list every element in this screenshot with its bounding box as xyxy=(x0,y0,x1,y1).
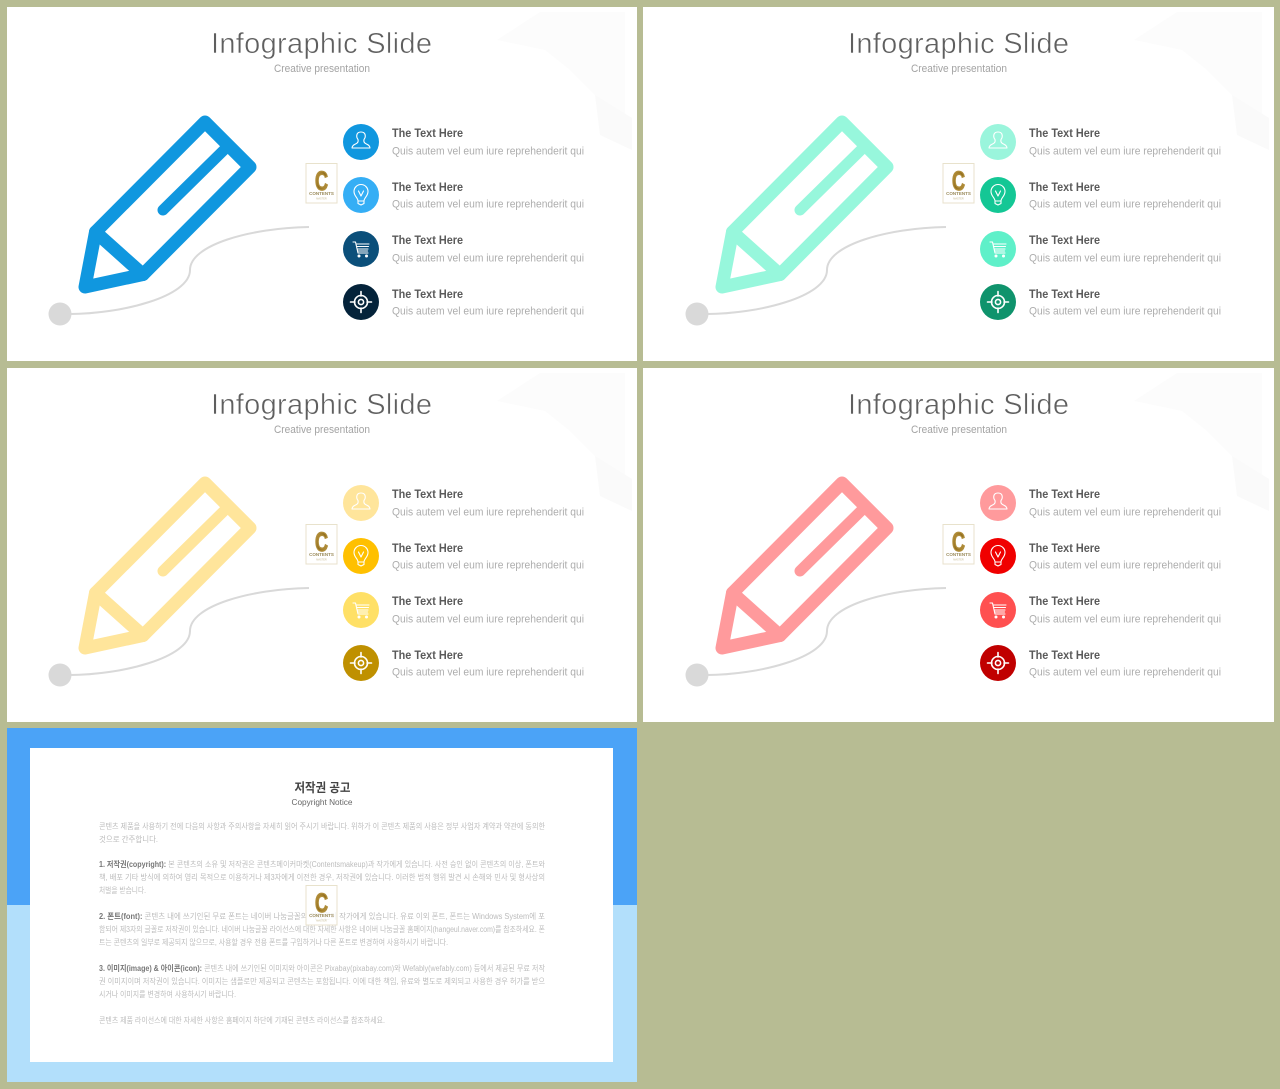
item 2 xyxy=(343,177,584,213)
panel: yellow slide xyxy=(7,368,637,722)
item 3: Quis autem vel eum iure reprehenderit qui xyxy=(392,614,584,626)
item 3 xyxy=(343,231,584,267)
item 2: The Text Here xyxy=(1029,182,1100,194)
logo badge xyxy=(943,164,974,203)
logo badge: C xyxy=(315,166,328,196)
panel: copyright notice xyxy=(7,728,637,1082)
item 3: Quis autem vel eum iure reprehenderit qui xyxy=(1029,614,1221,626)
logo badge: CONTENTS xyxy=(946,552,971,557)
title: Infographic Slide xyxy=(211,389,432,421)
image and icon paragraph: 권 이미지이며 저작권이 있습니다. 이미지는 샘플로만 제공되고 콘텐츠는 포함됩니다. 이에 대한 책임, 유료와 별도로 제외되고 사용한 경우 허가를 받으 xyxy=(99,976,545,986)
image and icon paragraph: 시거나 이미지를 변경하여 사용하시기 바랍니다. xyxy=(99,989,236,999)
item 2: Quis autem vel eum iure reprehenderit qui xyxy=(392,560,584,572)
item 3 xyxy=(980,231,1221,267)
item 2: Quis autem vel eum iure reprehenderit qui xyxy=(392,198,584,210)
logo badge: C xyxy=(952,166,965,196)
copyright paragraph: 처벌을 받습니다. xyxy=(99,885,146,895)
intro paragraph: 콘텐츠 제품을 사용하기 전에 다음의 사항과 주의사항을 자세히 읽어 주시기 바랍니다. 위하가 이 콘텐츠 제품의 사용은 정부 사업자 계약과 약관에 동의한 xyxy=(99,821,546,831)
item 1: Quis autem vel eum iure reprehenderit qui xyxy=(392,506,584,518)
logo badge: MASTER xyxy=(953,198,964,200)
notice subtitle: Copyright Notice xyxy=(292,797,353,807)
item 1 xyxy=(343,124,584,160)
item 1 xyxy=(343,485,584,521)
item 3: The Text Here xyxy=(392,596,463,608)
item 4: The Text Here xyxy=(392,650,463,662)
logo badge xyxy=(306,886,337,925)
logo badge xyxy=(306,164,337,203)
logo badge: MASTER xyxy=(316,198,327,200)
font paragraph xyxy=(99,911,545,947)
copyright paragraph: 1. 저작권(copyright): 본 콘텐츠의 소유 및 저작권은 콘텐츠메이커마켓(Contentsmakeup)과 작가에게 있습니다. 사전 승인 없이 콘텐츠의 이상, 폰트와 xyxy=(99,859,546,869)
item 3 xyxy=(343,592,584,628)
panel: blue slide xyxy=(7,7,637,361)
light blue lower background xyxy=(7,905,637,1082)
font paragraph: 2. 폰트(font): 콘텐츠 내에 쓰기인된 무료 폰트는 네이버 나눔글꼴의 저작권이 작가에게 있습니다. 유료 이외 폰트, 폰트는 Windows System에 포 xyxy=(99,911,545,921)
item 2 xyxy=(980,177,1221,213)
slide card xyxy=(7,368,637,722)
item 3: The Text Here xyxy=(1029,235,1100,247)
icon: pencil xyxy=(722,483,887,648)
logo badge: C xyxy=(315,888,328,918)
item 4: The Text Here xyxy=(392,289,463,301)
item 2: Quis autem vel eum iure reprehenderit qui xyxy=(1029,198,1221,210)
logo badge: CONTENTS xyxy=(309,913,334,918)
item 3: The Text Here xyxy=(392,235,463,247)
watermark polygons xyxy=(497,373,632,511)
slide card xyxy=(643,368,1274,722)
item 4: Quis autem vel eum iure reprehenderit qui xyxy=(392,306,584,318)
icon: pencil xyxy=(85,122,250,287)
image and icon paragraph xyxy=(99,963,546,999)
blue upper background xyxy=(7,728,637,905)
copyright paragraph: 책, 배포 기타 방식에 의하여 영리 목적으로 이용하거나 제3자에게 이전한 경우, 저작권에 있습니다. 이러한 법적 행위 발견 시 손해와 민사 및 형사상의 xyxy=(99,872,545,882)
logo badge: MASTER xyxy=(316,920,327,922)
item 1: Quis autem vel eum iure reprehenderit qui xyxy=(392,146,584,158)
item 3 xyxy=(980,592,1221,628)
item 4: The Text Here xyxy=(1029,650,1100,662)
curve with dot xyxy=(686,227,946,326)
item 1: The Text Here xyxy=(1029,489,1100,501)
curve with dot xyxy=(686,588,946,686)
logo badge: MASTER xyxy=(953,558,964,562)
item 2 xyxy=(980,538,1221,574)
slide card xyxy=(643,7,1274,361)
item 3: Quis autem vel eum iure reprehenderit qui xyxy=(392,252,584,264)
item 1: The Text Here xyxy=(1029,128,1100,140)
subtitle: Creative presentation xyxy=(911,63,1007,75)
item 4 xyxy=(343,645,584,681)
panel: mint slide xyxy=(643,7,1274,361)
title: Infographic Slide xyxy=(211,28,432,60)
item 2: The Text Here xyxy=(1029,543,1100,555)
logo badge: C xyxy=(315,527,328,557)
item 4: Quis autem vel eum iure reprehenderit qui xyxy=(1029,306,1221,318)
intro paragraph: 것으로 간주합니다. xyxy=(99,834,158,844)
item 3: Quis autem vel eum iure reprehenderit qui xyxy=(1029,252,1221,264)
watermark polygons xyxy=(1134,12,1269,150)
item 4: Quis autem vel eum iure reprehenderit qui xyxy=(1029,666,1221,678)
logo badge: CONTENTS xyxy=(309,191,334,196)
item 4 xyxy=(980,284,1221,320)
logo badge xyxy=(943,524,974,564)
icon: pencil xyxy=(85,483,250,648)
subtitle: Creative presentation xyxy=(274,63,370,75)
curve with dot xyxy=(48,227,309,326)
item 1: The Text Here xyxy=(392,489,463,501)
logo badge: CONTENTS xyxy=(309,552,334,557)
item 4: The Text Here xyxy=(1029,289,1100,301)
item 1: Quis autem vel eum iure reprehenderit qui xyxy=(1029,146,1221,158)
subtitle: Creative presentation xyxy=(911,424,1007,436)
curve with dot xyxy=(48,588,309,686)
item 1 xyxy=(980,485,1221,521)
title: Infographic Slide xyxy=(848,389,1069,421)
watermark polygons xyxy=(497,12,632,150)
subtitle: Creative presentation xyxy=(274,424,370,436)
font paragraph: 함되어 제3자의 글꼴로 저작권이 있습니다. 네이버 나눔글꼴 라이선스에 대한 자세한 사항은 네이버 나눔글꼴 홈페이지(hangeul.naver.com)를 참조하세요. 폰 xyxy=(99,924,545,934)
copyright paragraph xyxy=(99,859,546,895)
item 1 xyxy=(980,124,1221,160)
closing line: 콘텐츠 제품 라이선스에 대한 자세한 사항은 홈페이지 하단에 기재된 콘텐츠 라이선스를 참조하세요. xyxy=(99,1015,385,1025)
item 1: Quis autem vel eum iure reprehenderit qui xyxy=(1029,506,1221,518)
notice title: 저작권 공고 xyxy=(294,780,350,795)
logo badge: MASTER xyxy=(316,558,327,562)
slide card xyxy=(7,7,637,361)
item 1: The Text Here xyxy=(392,128,463,140)
font paragraph: 트는 콘텐츠의 일부로 제공되지 않으므로, 사용할 경우 전용 폰트를 구입하거나 다른 폰트로 변경하여 사용하시기 바랍니다. xyxy=(99,937,448,947)
item 4 xyxy=(980,645,1221,681)
item 2: The Text Here xyxy=(392,182,463,194)
watermark polygons xyxy=(1134,373,1269,511)
item 2: The Text Here xyxy=(392,543,463,555)
logo badge: C xyxy=(952,527,965,557)
logo badge xyxy=(306,524,337,564)
white sheet xyxy=(30,748,613,1062)
item 2 xyxy=(343,538,584,574)
image and icon paragraph: 3. 이미지(image) & 아이콘(icon): 콘텐츠 내에 쓰기인된 이미지와 아이콘은 Pixabay(pixabay.com)와 Wefably(wefably.com) 등에서 제공된 무료 저작 xyxy=(99,963,546,973)
item 2: Quis autem vel eum iure reprehenderit qui xyxy=(1029,560,1221,572)
panel: red slide xyxy=(643,368,1274,722)
logo badge: CONTENTS xyxy=(946,191,971,196)
icon: pencil xyxy=(722,122,887,287)
title: Infographic Slide xyxy=(848,28,1069,60)
item 3: The Text Here xyxy=(1029,596,1100,608)
item 4: Quis autem vel eum iure reprehenderit qui xyxy=(392,666,584,678)
item 4 xyxy=(343,284,584,320)
intro paragraph xyxy=(99,821,546,844)
